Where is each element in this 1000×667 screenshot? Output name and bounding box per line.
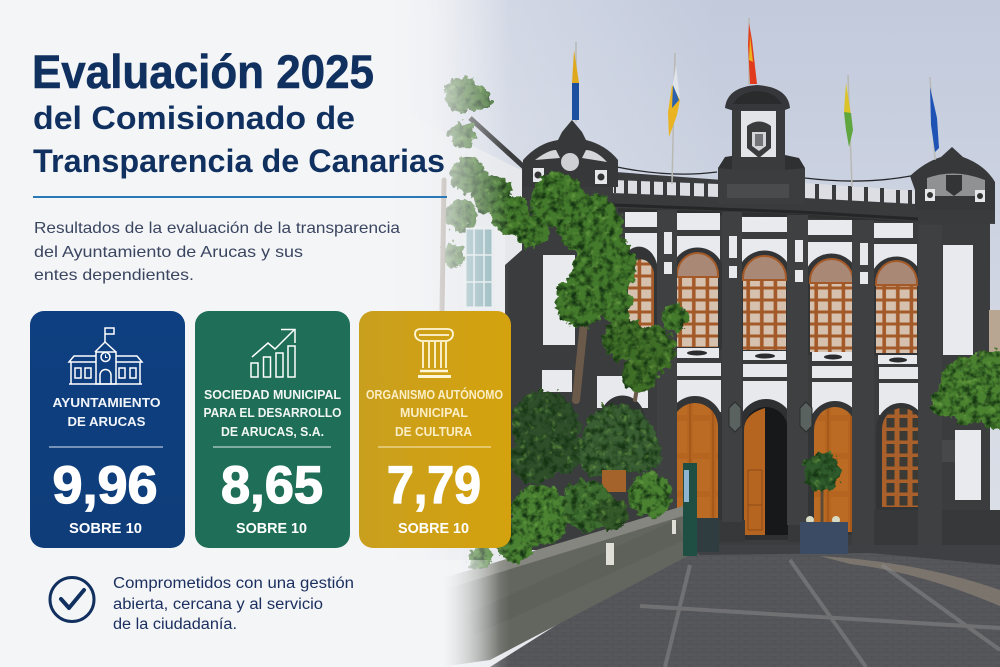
commitment text: abierta, cercana y al servicio xyxy=(113,596,323,613)
intro text xyxy=(34,220,400,284)
doors xyxy=(667,396,926,540)
entity name: DE ARUCAS xyxy=(68,414,146,429)
entity name: ORGANISMO AUTÓNOMO xyxy=(366,387,503,402)
intro text: entes dependientes. xyxy=(34,267,194,284)
card: Organismo Autónomo xyxy=(359,311,511,548)
left turret xyxy=(523,120,618,187)
far right building xyxy=(989,310,1000,355)
title: del Comisionado de xyxy=(33,100,355,136)
central tower xyxy=(718,85,805,204)
entity name xyxy=(204,388,342,439)
intro text: del Ayuntamiento de Arucas y sus xyxy=(34,244,303,261)
icon: town hall xyxy=(69,328,142,384)
entity name xyxy=(366,387,503,439)
entity name xyxy=(52,395,160,429)
entity name: MUNICIPAL xyxy=(400,406,468,420)
facade xyxy=(505,165,1000,550)
intro text: Resultados de la evaluación de la transparencia xyxy=(34,220,400,237)
icon: check mark xyxy=(50,578,94,622)
dark bushes xyxy=(509,391,662,484)
title: Transparencia de Canarias xyxy=(33,143,445,179)
pavement xyxy=(490,545,1000,667)
title divider xyxy=(33,196,447,198)
entity name: DE CULTURA xyxy=(395,425,472,439)
commitment text: de la ciudadanía. xyxy=(113,616,237,633)
score: 8,65 xyxy=(221,456,323,515)
trunks xyxy=(442,180,645,400)
pilasters xyxy=(657,210,942,545)
potted tree xyxy=(800,453,848,554)
right turret xyxy=(910,147,995,210)
trees xyxy=(440,77,1000,570)
commitment text xyxy=(113,575,354,633)
main tree xyxy=(490,172,689,392)
title: Evaluación 2025 xyxy=(32,45,374,98)
score: 7,79 xyxy=(387,456,481,515)
lower white fade over wall xyxy=(395,560,500,667)
entity name: SOCIEDAD MUNICIPAL xyxy=(204,388,341,402)
icon: growth chart xyxy=(251,330,295,377)
commitment text: Comprometidos con una gestión xyxy=(113,575,354,592)
scale label: SOBRE 10 xyxy=(236,520,307,537)
card: Sociedad Municipal xyxy=(195,311,350,548)
card: Ayuntamiento de Arucas xyxy=(30,311,185,548)
left wing of the building xyxy=(400,110,525,400)
upper windows xyxy=(620,247,923,356)
title xyxy=(32,45,445,179)
flags xyxy=(572,18,939,187)
scale label: SOBRE 10 xyxy=(398,520,469,537)
street post and bin xyxy=(683,463,719,556)
lower white bands xyxy=(597,348,921,415)
entity name: PARA EL DESARROLLO xyxy=(204,406,342,420)
scale label: SOBRE 10 xyxy=(69,520,142,537)
balustrade and cornice xyxy=(612,167,995,224)
planter wall xyxy=(400,506,688,667)
entity name: DE ARUCAS, S.A. xyxy=(221,425,324,439)
score: 9,96 xyxy=(52,456,158,515)
base and plinth xyxy=(719,510,1000,545)
icon: column xyxy=(415,329,453,376)
lower bushes xyxy=(468,473,672,570)
upper white bands xyxy=(542,212,981,500)
right tree xyxy=(931,350,1000,430)
entity name: AYUNTAMIENTO xyxy=(52,395,160,410)
faded left tree xyxy=(440,77,512,267)
lanterns xyxy=(729,402,812,432)
